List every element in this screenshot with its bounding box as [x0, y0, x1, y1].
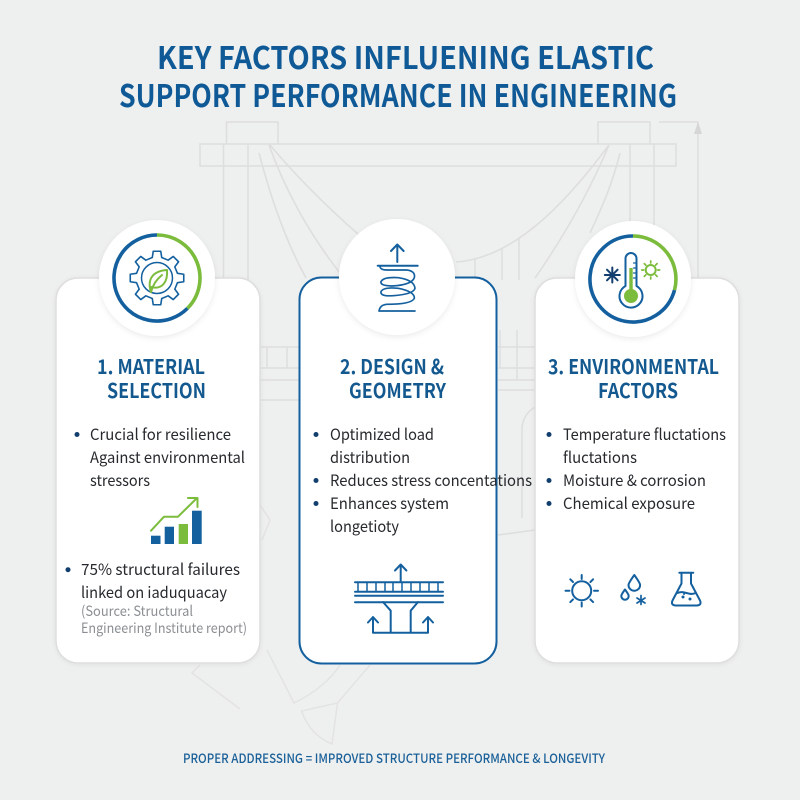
bullet: resilience — [74, 423, 245, 491]
heading: GEOMETRY — [349, 375, 446, 404]
background: faded suspension bridge line drawing — [192, 122, 702, 744]
heading — [340, 351, 446, 404]
icon: bridge deck with load arrows — [355, 564, 443, 633]
footer statement: PROPER ADDRESSING = IMPROVED STRUCTURE PERFORMANCE & LONGEVITY — [183, 748, 606, 767]
bullet list: fluctations — [563, 446, 637, 468]
title: SUPPORT PERFORMANCE IN ENGINEERING — [119, 71, 677, 116]
bullet: resilience: Against environmental — [90, 446, 245, 468]
title: KEY FACTORS INFLUENING ELASTIC — [157, 33, 654, 78]
heading: 2. DESIGN & — [340, 351, 444, 380]
icon: rising bar chart — [151, 498, 202, 544]
bullet list: Moisture & corrosion — [563, 469, 706, 491]
icon: chemistry flask — [672, 573, 701, 606]
bullet list: Chemical exposure — [563, 492, 695, 514]
bullet list — [314, 423, 532, 537]
icon: thermometer with snow and sun — [575, 221, 691, 337]
heading — [97, 351, 206, 404]
panel: environmental factors — [535, 221, 739, 663]
bullet: resilience: Crucial for resilience — [90, 423, 231, 445]
icon: spring with arrow — [339, 219, 455, 335]
bullet list: Optimized load — [330, 423, 434, 445]
heading: FACTORS — [598, 375, 678, 404]
bullet: structural failures: linked on iaduquacay — [81, 581, 227, 603]
bullet list: Enhances system — [330, 492, 449, 514]
bullet: resilience: stressors — [90, 469, 150, 491]
bullet list: Reduces stress concentations — [330, 469, 532, 491]
icon: gear with leaf in ring — [99, 220, 215, 336]
bullet: structural failures — [66, 558, 240, 603]
panel: material selection — [56, 220, 260, 663]
heading — [548, 351, 719, 404]
source note — [81, 601, 247, 638]
bullet list — [546, 423, 726, 514]
icon: sun — [566, 575, 598, 606]
heading: SELECTION — [107, 375, 206, 404]
bullet list: distribution — [330, 446, 410, 468]
bullet list: Temperature fluctations — [563, 423, 726, 445]
source note: Engineering Institute report) — [81, 618, 247, 638]
bullet: structural failures: 75% structural failures — [81, 558, 240, 580]
title — [119, 33, 677, 116]
icon: water drops — [621, 575, 645, 604]
source note: (Source: Structural — [81, 601, 193, 621]
heading: 1. MATERIAL — [97, 351, 205, 380]
bullet list: longetioty — [330, 515, 399, 537]
heading: 3. ENVIRONMENTAL — [548, 351, 719, 380]
panel: design and geometry — [300, 219, 532, 664]
